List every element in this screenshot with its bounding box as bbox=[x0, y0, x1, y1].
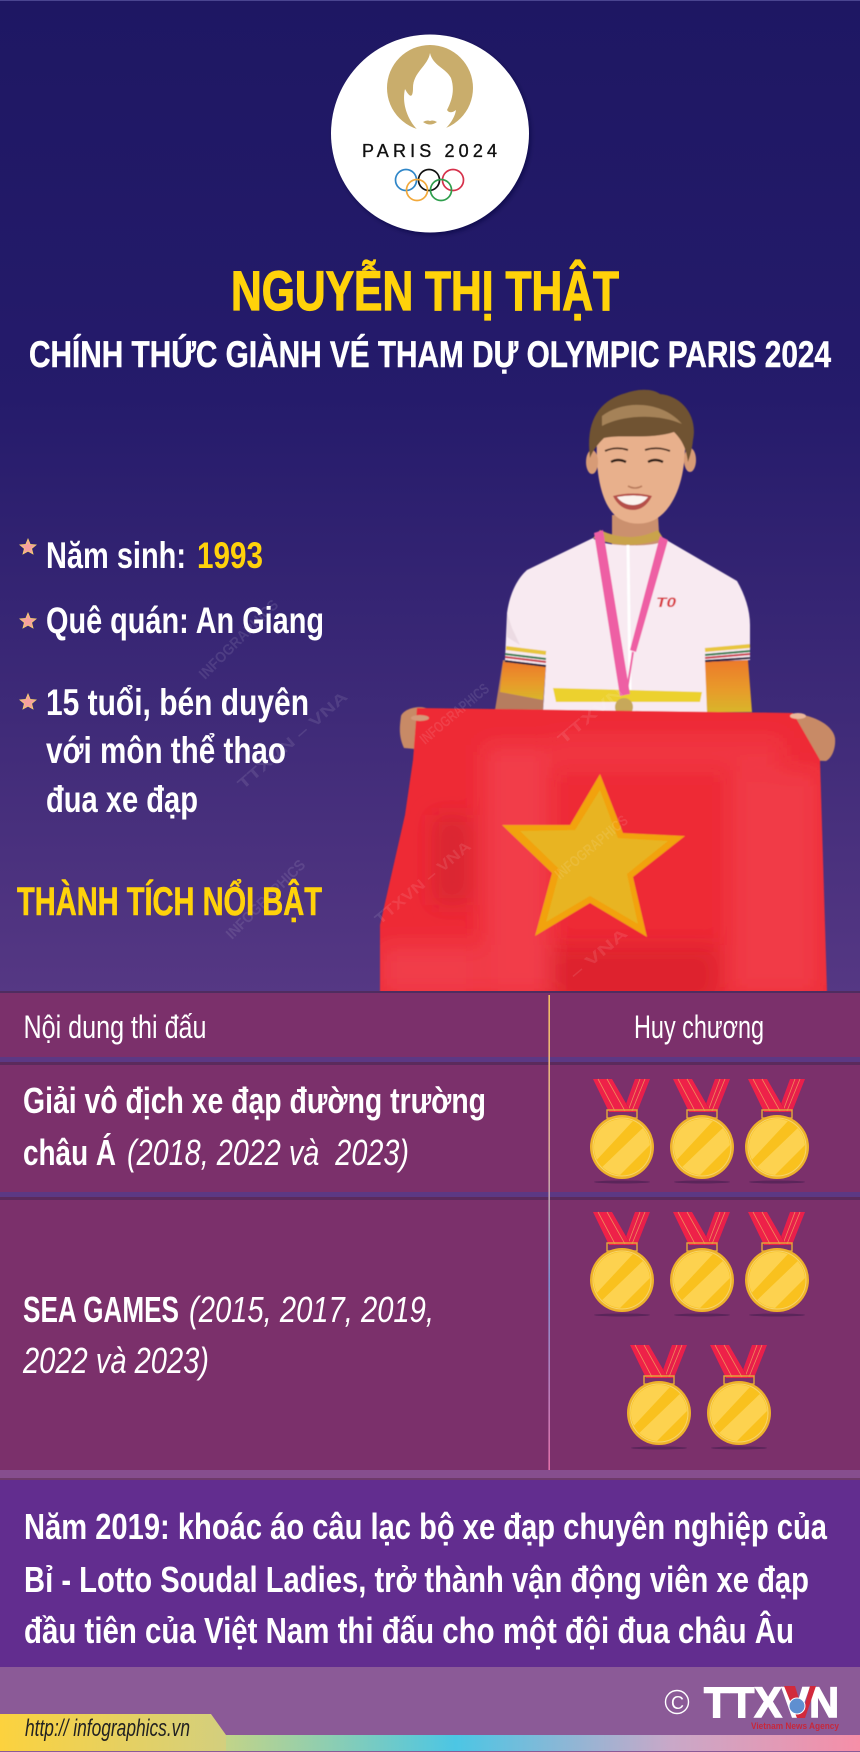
hometown: Quê quán: An Giang bbox=[46, 600, 324, 641]
copyright symbol bbox=[666, 1690, 688, 1714]
footer panel bbox=[0, 1667, 860, 1752]
title: athlete name: NGUYỄN THỊ THẬT bbox=[231, 259, 619, 322]
birth year: Năm sinh: bbox=[46, 535, 186, 576]
flag star bbox=[502, 774, 685, 937]
copyright symbol: C bbox=[671, 1693, 684, 1713]
hands bbox=[400, 707, 430, 750]
hair bbox=[589, 390, 694, 462]
flag watermarks: TTXVN – VNA bbox=[372, 838, 475, 928]
flag watermarks: – VNA bbox=[567, 925, 631, 983]
collar bbox=[593, 530, 663, 545]
right arm bbox=[704, 660, 752, 712]
info list bbox=[20, 535, 324, 820]
watermarks: INFOGRAPHICS bbox=[196, 597, 282, 683]
flag watermarks: INFOGRAPHICS bbox=[552, 812, 632, 883]
rainbow strip bbox=[0, 1735, 860, 1751]
callout: 2019 club bbox=[0, 1470, 860, 1667]
column divider bbox=[548, 995, 550, 1470]
logo: Paris 2024 badge: PARIS 2024 bbox=[362, 141, 497, 161]
bullet star bbox=[20, 539, 36, 554]
bullet star bbox=[20, 694, 36, 709]
header: event: Nội dung thi đấu bbox=[24, 1009, 206, 1045]
bullet star bbox=[20, 613, 36, 628]
logo: Paris 2024 badge bbox=[331, 34, 531, 235]
url tag bbox=[0, 1714, 226, 1751]
sleeve stripes bbox=[505, 646, 750, 666]
flag watermarks: TTXVN bbox=[555, 684, 627, 748]
row 2 label: (2015, 2017, 2019, bbox=[189, 1289, 434, 1330]
flag watermarks bbox=[372, 680, 632, 983]
watermarks: TTXVN – VNA bbox=[234, 688, 351, 793]
table panel bbox=[0, 991, 860, 1470]
icons: row 1 gold medals bbox=[582, 1079, 811, 1185]
jersey bbox=[505, 538, 750, 712]
logo: TTXVN: Vietnam News Agency bbox=[751, 1721, 840, 1732]
row 1 label: Giải vô địch xe đạp đường trường bbox=[23, 1080, 486, 1121]
row 1 label bbox=[23, 1080, 486, 1173]
table header divider bbox=[0, 1057, 860, 1062]
watermarks: INFOGRAPHICS bbox=[223, 857, 309, 943]
row 2 label: 2022 và 2023) bbox=[22, 1340, 209, 1381]
background gradient bbox=[0, 0, 860, 1000]
flag thumbs bbox=[411, 715, 429, 721]
row 1 label: (2018, 2022 và 2023) bbox=[127, 1132, 409, 1173]
left arm bbox=[495, 660, 546, 712]
heading: achievements: THÀNH TÍCH NỔI BẬT bbox=[17, 877, 322, 924]
info list: đua xe đạp bbox=[46, 779, 198, 820]
row 1 label: châu Á bbox=[23, 1132, 116, 1173]
lanyard bbox=[594, 530, 630, 696]
header: medals: Huy chương bbox=[634, 1009, 764, 1045]
logo: TTXVN: TTXVN bbox=[704, 1679, 839, 1727]
url tag: http:// infographics.vn bbox=[25, 1715, 190, 1742]
info list: 1993 bbox=[197, 535, 263, 576]
face bbox=[597, 418, 685, 524]
row 2 label: SEA GAMES bbox=[23, 1289, 179, 1330]
eyes and mouth bbox=[605, 448, 670, 451]
jersey logo: T0 bbox=[656, 594, 676, 610]
flag watermarks: INFOGRAPHICS bbox=[417, 680, 493, 748]
photo: athlete holding flag bbox=[380, 390, 835, 1005]
neck bbox=[612, 515, 660, 550]
info list: với môn thể thao bbox=[46, 730, 286, 771]
career start: 15 tuổi, bén duyên bbox=[46, 682, 309, 723]
icons: row 2 gold medals bbox=[582, 1212, 811, 1451]
flag bbox=[380, 708, 827, 992]
row divider bbox=[0, 1192, 860, 1197]
row 2 label bbox=[22, 1289, 434, 1381]
watermarks bbox=[196, 597, 351, 943]
